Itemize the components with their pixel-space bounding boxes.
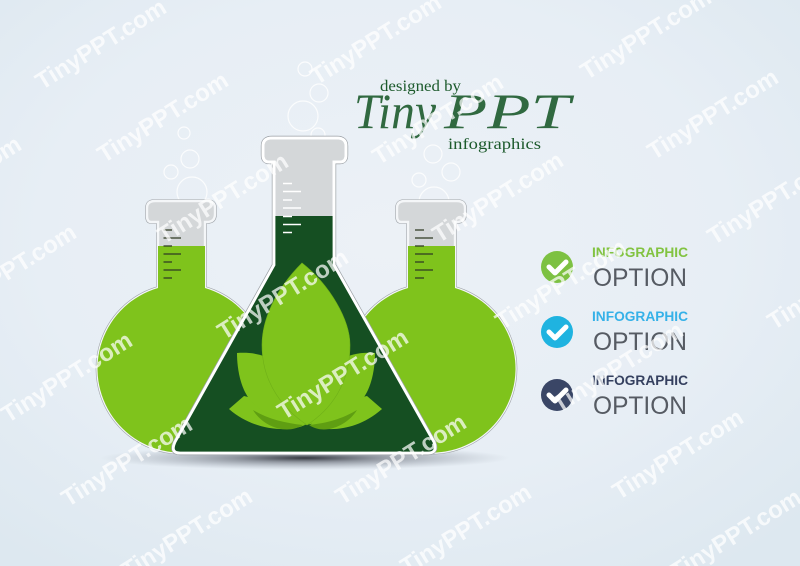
centre petal	[262, 263, 350, 425]
logo: designed by TinyPPT infographics: designed by	[380, 78, 461, 95]
icon: blue check	[541, 316, 573, 348]
scale ticks	[283, 184, 301, 232]
watermarks: TinyPPT.com	[57, 411, 197, 513]
logo: designed by TinyPPT infographics	[354, 78, 575, 153]
option 1: INFOGRAPHIC	[592, 245, 688, 260]
logo: designed by TinyPPT infographics: Tiny	[354, 83, 437, 139]
lower right leaf	[310, 396, 382, 429]
lower left leaf	[229, 396, 305, 429]
option 3: INFOGRAPHIC	[592, 373, 688, 388]
watermarks: TinyPPT.com	[331, 409, 471, 511]
left side petal	[237, 353, 306, 425]
bubbles: right flask	[412, 145, 460, 217]
centre flask	[170, 138, 440, 456]
option 3: OPTION	[593, 392, 687, 420]
watermarks: TinyPPT.com	[548, 317, 688, 419]
watermarks: TinyPPT.com	[93, 67, 233, 169]
bubbles: centre flask	[288, 62, 328, 142]
icon: green check	[541, 251, 573, 283]
watermarks: TinyPPT.com	[0, 327, 137, 429]
right side petal	[306, 353, 375, 425]
watermarks: TinyPPT.com	[213, 244, 353, 346]
option 3	[541, 373, 688, 420]
scale ticks	[164, 230, 181, 278]
watermarks: TinyPPT.com	[491, 234, 631, 336]
watermarks: TinyPPT.com	[608, 404, 748, 506]
bubbles: left flask	[164, 127, 207, 207]
scale ticks	[415, 230, 433, 278]
watermarks: TinyPPT.com	[428, 147, 568, 249]
watermarks: TinyPPT.com	[153, 148, 293, 250]
left flask	[96, 199, 246, 454]
ground shadow	[100, 446, 510, 470]
option 1: OPTION	[593, 264, 687, 292]
option 1	[541, 245, 688, 292]
leaf shading	[253, 410, 357, 429]
right flask	[364, 199, 518, 454]
option 2	[541, 309, 688, 356]
lotus icon	[229, 263, 382, 429]
logo: designed by TinyPPT infographics: PPT	[443, 83, 575, 139]
option 2: INFOGRAPHIC	[592, 309, 688, 324]
icon: navy check	[541, 379, 573, 411]
watermarks: TinyPPT.com	[643, 64, 783, 166]
option 2: OPTION	[593, 328, 687, 356]
watermarks: TinyPPT.com	[368, 69, 508, 171]
watermarks: TinyPPT.com	[273, 324, 413, 426]
logo: designed by TinyPPT infographics: infographics	[448, 136, 541, 153]
